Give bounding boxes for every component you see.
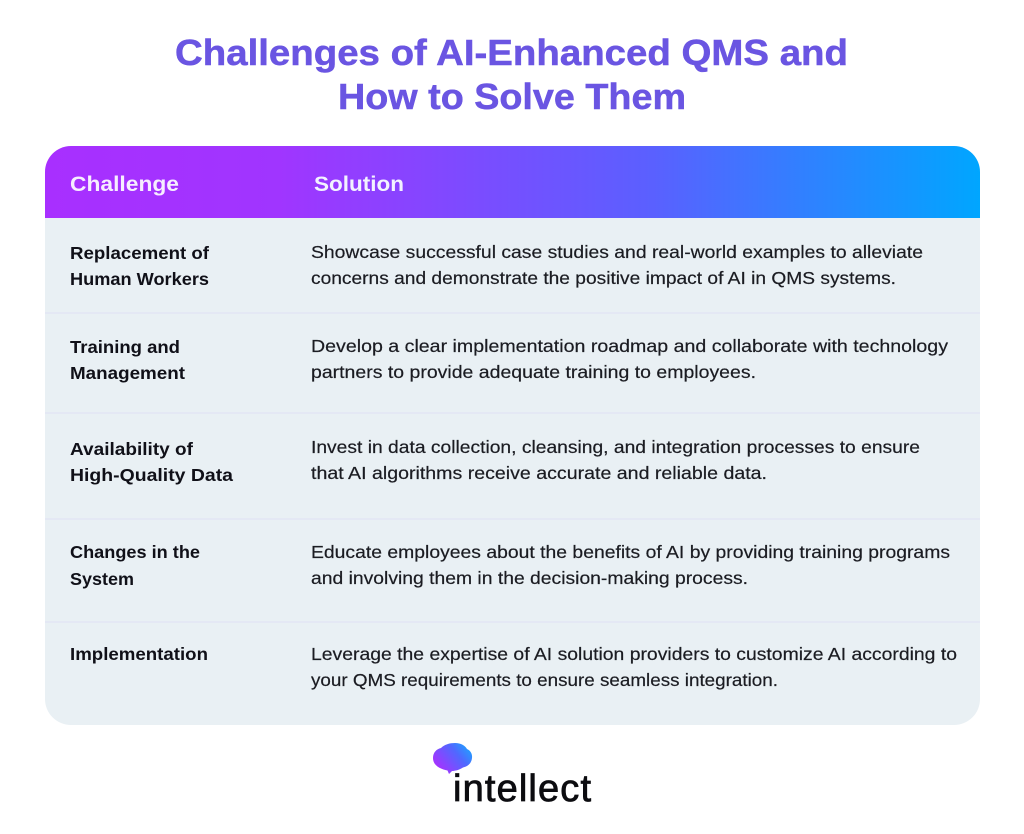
row: changes in the system: and involving them in the decision-making process. bbox=[311, 568, 748, 588]
row: implementation: Implementation bbox=[70, 644, 208, 664]
row: training and management bbox=[70, 336, 948, 383]
row: training and management: Training and bbox=[70, 337, 180, 357]
row: implementation bbox=[70, 644, 957, 690]
row: availability of high-quality data bbox=[70, 437, 920, 485]
row: changes in the system: System bbox=[70, 569, 134, 589]
row: replacement of human workers: Showcase successful case studies and real-world examples to alleviate bbox=[311, 242, 923, 262]
row: changes in the system: Changes in the bbox=[70, 542, 200, 562]
title: Challenges of AI-Enhanced QMS and bbox=[175, 32, 848, 73]
row: implementation: Leverage the expertise of AI solution providers to customize AI according to bbox=[311, 644, 957, 664]
row: availability of high-quality data: Availability of bbox=[70, 439, 193, 459]
row: training and management: Develop a clear implementation roadmap and collaborate with technology bbox=[311, 336, 948, 356]
row: training and management: Management bbox=[70, 363, 185, 383]
row: replacement of human workers bbox=[70, 242, 923, 289]
row: replacement of human workers: Replacement of bbox=[70, 243, 209, 263]
table header band bbox=[45, 146, 980, 218]
table header band: Solution bbox=[314, 172, 404, 196]
row: changes in the system bbox=[70, 542, 950, 589]
title bbox=[175, 32, 848, 117]
logo: intellect bbox=[433, 743, 591, 810]
row: training and management: partners to provide adequate training to employees. bbox=[311, 362, 756, 382]
row: replacement of human workers: concerns and demonstrate the positive impact of AI in QMS systems. bbox=[311, 268, 896, 288]
icon: cloud brain bbox=[433, 743, 472, 774]
title: How to Solve Them bbox=[338, 76, 686, 117]
row: availability of high-quality data: that AI algorithms receive accurate and reliable data. bbox=[311, 463, 767, 483]
row: implementation: your QMS requirements to ensure seamless integration. bbox=[311, 670, 778, 690]
row: availability of high-quality data: Invest in data collection, cleansing, and integration processes to ensure bbox=[311, 437, 920, 457]
row: changes in the system: Educate employees about the benefits of AI by providing training programs bbox=[311, 542, 950, 562]
panel: table bbox=[45, 146, 980, 725]
table header band: Challenge bbox=[70, 172, 179, 196]
table body background bbox=[45, 146, 980, 725]
row: availability of high-quality data: High-Quality Data bbox=[70, 465, 233, 485]
row: replacement of human workers: Human Workers bbox=[70, 269, 209, 289]
logo: intellect: intellect bbox=[453, 768, 591, 810]
